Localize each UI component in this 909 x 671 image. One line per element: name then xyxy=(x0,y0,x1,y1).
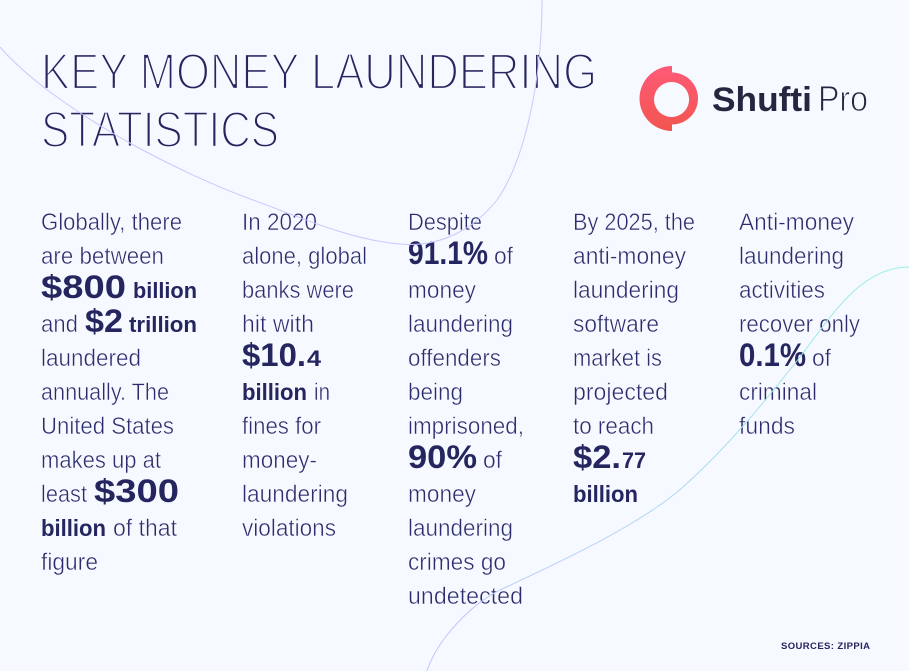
column 2: bank fines: In 2020 xyxy=(242,209,317,236)
column 3: imprisonment and detection: Despite xyxy=(408,209,482,236)
column 1: global laundering total: figure xyxy=(41,549,98,576)
column 3: imprisonment and detection: money xyxy=(408,277,477,304)
column 4: AML software market: anti-money xyxy=(573,243,687,270)
column 1: global laundering total xyxy=(41,209,197,576)
column 2: bank fines: billion xyxy=(242,379,307,405)
column 1: global laundering total: United States xyxy=(41,413,174,440)
column 1: global laundering total: $800 xyxy=(41,269,126,305)
logo wordmark: Pro xyxy=(818,78,868,119)
logo: Shufti Pro xyxy=(640,66,868,131)
column 2: bank fines: fines for xyxy=(242,413,321,440)
title xyxy=(41,43,597,158)
column 1: global laundering total: $2 xyxy=(85,303,123,339)
column 4: AML software market: By 2025, the xyxy=(573,209,695,236)
column 2: bank fines: $10. xyxy=(242,337,306,373)
column 5: recovered funds: activities xyxy=(739,277,825,304)
column 4: AML software market: software xyxy=(573,311,659,338)
column 2: bank fines xyxy=(242,209,367,542)
column 1: global laundering total: billion xyxy=(133,278,197,303)
title: STATISTICS xyxy=(41,101,279,158)
column 1: global laundering total: trillion xyxy=(129,312,197,337)
column 1: global laundering total: Globally, there xyxy=(41,209,182,236)
column 4: AML software market: laundering xyxy=(573,277,679,304)
column 3: imprisonment and detection: laundering xyxy=(408,515,513,542)
column 4: AML software market xyxy=(573,209,695,507)
column 5: recovered funds: criminal xyxy=(739,379,817,406)
column 5: recovered funds xyxy=(739,209,861,440)
column 5: recovered funds: laundering xyxy=(739,243,844,270)
logo wordmark xyxy=(712,78,868,119)
column 4: AML software market: projected xyxy=(573,379,668,406)
column 2: bank fines: hit with xyxy=(242,311,314,338)
column 1: global laundering total: makes up at xyxy=(41,447,161,474)
column 1: global laundering total: billion xyxy=(41,515,106,541)
column 2: bank fines: in xyxy=(314,379,330,406)
column 3: imprisonment and detection: 90% xyxy=(408,439,477,475)
sources note: SOURCES: ZIPPIA xyxy=(781,641,870,652)
column 2: bank fines: 4 xyxy=(307,346,322,371)
column 5: recovered funds: of xyxy=(812,345,831,372)
column 3: imprisonment and detection: 91.1% xyxy=(408,235,488,271)
logo wordmark: Shufti xyxy=(712,81,812,119)
column 5: recovered funds: recover only xyxy=(739,311,861,338)
column 5: recovered funds: funds xyxy=(739,413,795,440)
column 2: bank fines: laundering xyxy=(242,481,348,508)
column 3: imprisonment and detection: crimes go xyxy=(408,549,506,576)
column 1: global laundering total: $300 xyxy=(94,473,179,509)
column 3: imprisonment and detection: money xyxy=(408,481,477,508)
column 3: imprisonment and detection: offenders xyxy=(408,345,501,372)
icon: logo ring xyxy=(640,66,698,131)
column 2: bank fines: violations xyxy=(242,515,336,542)
column 5: recovered funds: Anti-money xyxy=(739,209,855,236)
column 2: bank fines: banks were xyxy=(242,277,354,304)
column 3: imprisonment and detection: imprisoned, xyxy=(408,413,524,440)
column 4: AML software market: to reach xyxy=(573,413,654,440)
column 1: global laundering total: are between xyxy=(41,243,164,270)
column 3: imprisonment and detection xyxy=(408,209,524,610)
column 3: imprisonment and detection: being xyxy=(408,379,463,406)
column 2: bank fines: alone, global xyxy=(242,243,367,270)
title: KEY MONEY LAUNDERING xyxy=(41,43,597,100)
column 3: imprisonment and detection: laundering xyxy=(408,311,513,338)
column 3: imprisonment and detection: undetected xyxy=(408,583,523,610)
column 2: bank fines: money- xyxy=(242,447,317,474)
column 4: AML software market: $2. xyxy=(573,439,621,475)
column 5: recovered funds: 0.1% xyxy=(739,337,806,373)
column 1: global laundering total: annually. The xyxy=(41,379,169,406)
column 4: AML software market: 77 xyxy=(622,448,646,473)
column 4: AML software market: market is xyxy=(573,345,662,372)
column 1: global laundering total: of that xyxy=(113,515,177,542)
column 3: imprisonment and detection: of xyxy=(483,447,502,474)
column 1: global laundering total: laundered xyxy=(41,345,141,372)
column 3: imprisonment and detection: of xyxy=(494,243,513,270)
column 1: global laundering total: and xyxy=(41,311,78,338)
column 1: global laundering total: least xyxy=(41,481,87,508)
column 4: AML software market: billion xyxy=(573,481,638,507)
